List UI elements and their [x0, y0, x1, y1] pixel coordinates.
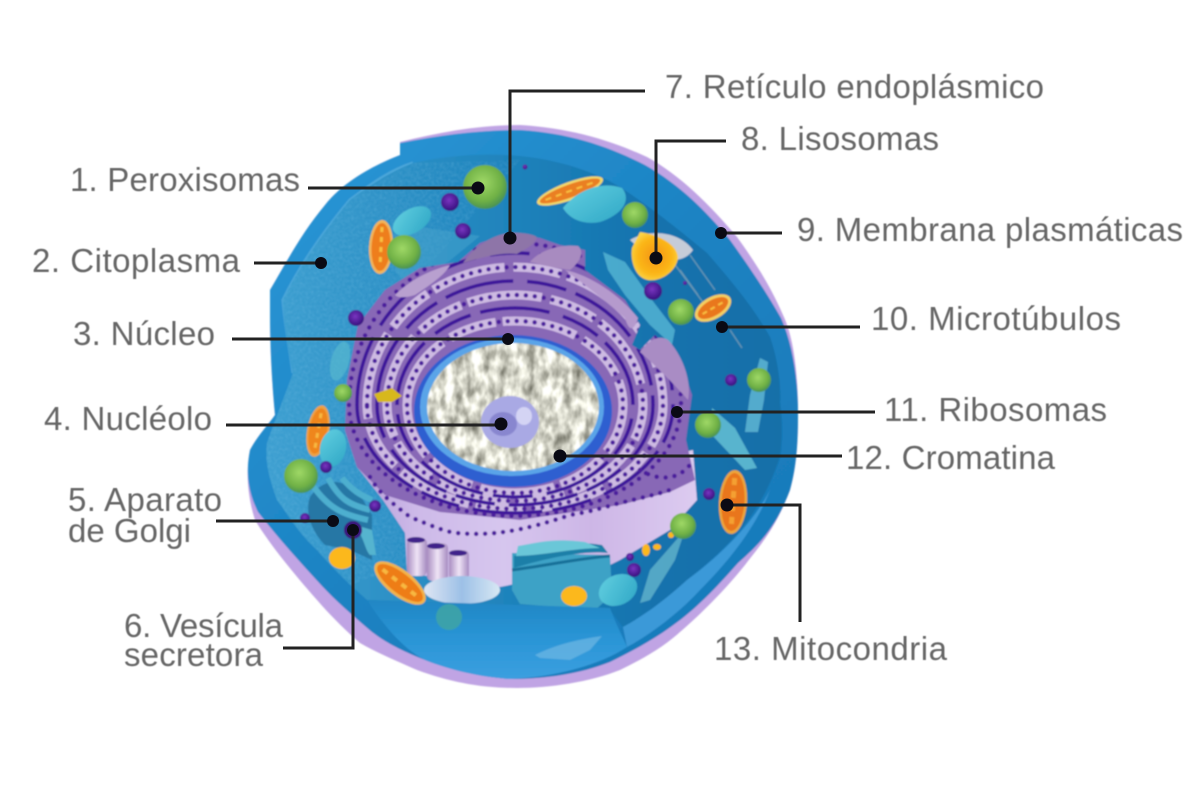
nucleolus — [481, 396, 539, 448]
stacked cylinders — [407, 537, 469, 581]
ribosome dots — [349, 243, 681, 516]
label 11: Ribosomas: 11. Ribosomas — [884, 391, 1107, 428]
label 8: Lisosomas — [650, 120, 939, 264]
right front wall — [623, 490, 770, 647]
cytoplasm cavity — [266, 155, 782, 627]
label 5: Aparato de Golgi — [68, 481, 339, 549]
mitochondria — [303, 171, 749, 612]
teal vesicles — [316, 185, 642, 612]
label 10: Microtúbulos — [716, 300, 1121, 337]
green peroxisomes — [284, 165, 771, 539]
upper pale rim highlight — [283, 163, 413, 373]
reticulum lilac caps — [395, 233, 689, 400]
plasma membrane outer rim — [248, 125, 798, 688]
label 12: Cromatina: 12. Cromatina — [846, 439, 1056, 476]
microtubule fibres — [395, 225, 768, 603]
teal sphere on wall — [436, 604, 462, 630]
label 13: Mitocondria: 13. Mitocondria — [714, 630, 948, 667]
label 10: Microtúbulos: 10. Microtúbulos — [871, 300, 1121, 337]
dark membrane lines — [357, 253, 673, 513]
label 4: Nucléolo — [44, 400, 508, 437]
lower ribosome rows — [370, 462, 692, 534]
label 6: Vesícula secretora: secretora — [124, 636, 264, 673]
blue cell wall — [248, 130, 798, 679]
purple vesicles — [300, 164, 737, 577]
label 2: Citoplasma: 2. Citoplasma — [32, 242, 241, 279]
label 3: Núcleo: 3. Núcleo — [73, 315, 215, 352]
pale cisternae — [367, 267, 663, 509]
nuclear envelope — [414, 335, 612, 487]
label 12: Cromatina — [554, 439, 1056, 476]
label 1: Peroxisomas: 1. Peroxisomas — [70, 161, 300, 198]
yellow granules — [329, 532, 674, 606]
endoplasmic reticulum — [344, 236, 696, 521]
label 11: Ribosomas — [671, 391, 1107, 428]
front wall highlight — [535, 636, 602, 660]
cell illustration — [248, 125, 798, 688]
bottom oval vesicle — [424, 576, 500, 604]
label 1: Peroxisomas — [70, 161, 484, 198]
reticulum base — [344, 236, 696, 521]
yellow patch — [374, 388, 402, 402]
label 8: Lisosomas: 8. Lisosomas — [741, 120, 939, 157]
label 5: Aparato de Golgi: de Golgi — [68, 512, 191, 549]
label 13: Mitocondria — [714, 498, 948, 667]
label 3: Núcleo — [73, 315, 514, 352]
label 6: Vesícula secretora — [124, 524, 359, 673]
lilac nuclear body walls — [345, 430, 697, 587]
label 5: Aparato de Golgi: 5. Aparato — [68, 481, 222, 518]
lysosome — [630, 232, 693, 280]
label 9: Membrana plasmáticas: 9. Membrana plasmáticas — [797, 211, 1183, 248]
right golgi stack — [512, 540, 612, 610]
chromatin — [427, 343, 599, 471]
label 7: Retículo endoplásmico: 7. Retículo endoplásmico — [665, 68, 1044, 105]
label 6: Vesícula secretora: 6. Vesícula — [124, 607, 284, 644]
label 4: Nucléolo: 4. Nucléolo — [44, 400, 212, 437]
left golgi apparatus — [308, 478, 376, 560]
label 7: Retículo endoplásmico — [504, 68, 1044, 244]
cytoplasm texture — [266, 160, 520, 585]
nucleoplasm rim — [420, 338, 604, 476]
front wall — [367, 600, 627, 679]
